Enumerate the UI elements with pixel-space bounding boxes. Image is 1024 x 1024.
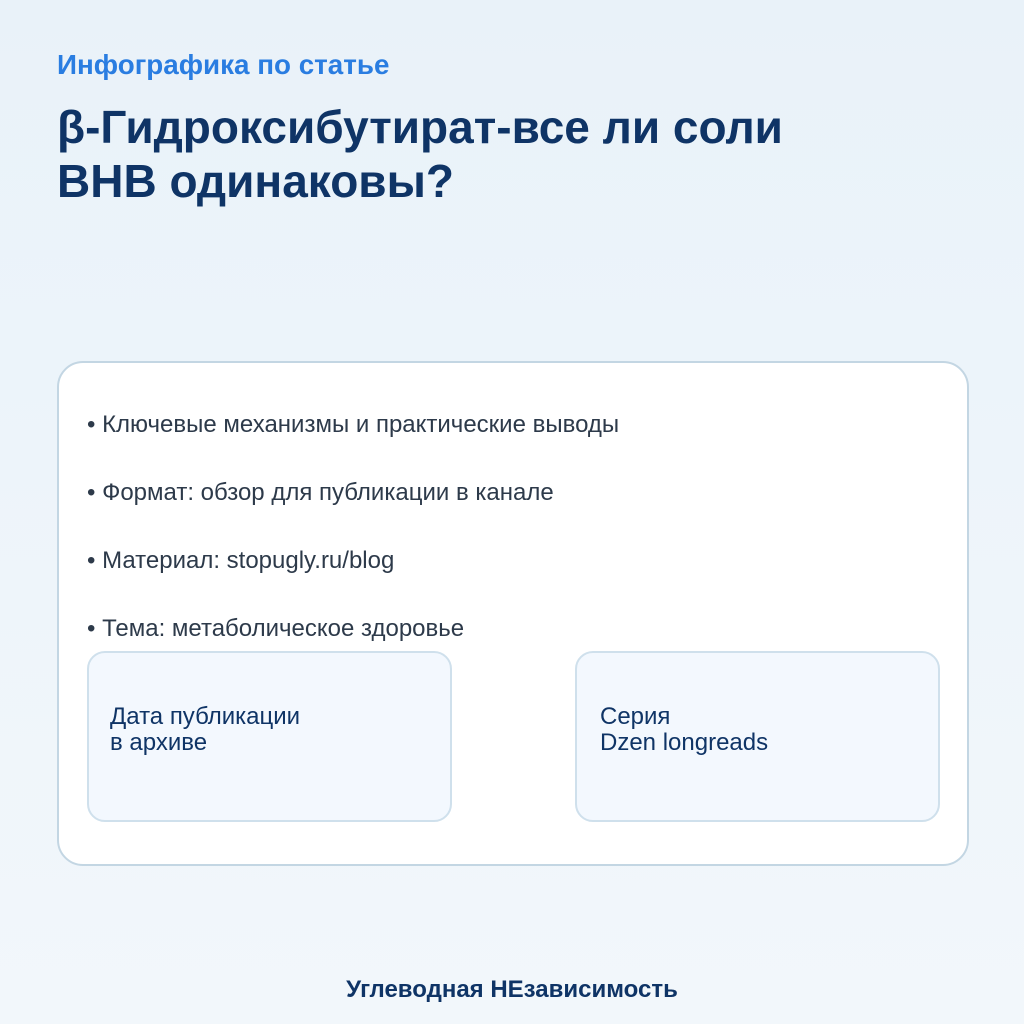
title: BHB одинаковы? bbox=[57, 155, 454, 207]
panel: series box bbox=[575, 651, 940, 822]
panel: date box bbox=[87, 651, 452, 822]
subtitle: Инфографика по статье bbox=[57, 49, 389, 80]
text block: bullets bbox=[87, 411, 619, 642]
title: β-Гидроксибутират-все ли соли bbox=[57, 101, 783, 153]
panel: date box: в архиве bbox=[110, 729, 207, 756]
text block: bullets: • Ключевые механизмы и практические выводы bbox=[87, 411, 619, 438]
text block: bullets: • Материал: stopugly.ru/blog bbox=[87, 547, 394, 574]
title bbox=[57, 101, 783, 207]
text block: bullets: • Формат: обзор для публикации в канале bbox=[87, 479, 554, 506]
panel: series box: Dzen longreads bbox=[600, 729, 768, 756]
footer: Углеводная НЕзависимость bbox=[346, 976, 678, 1003]
panel: series box: Серия bbox=[600, 703, 670, 730]
text block: bullets: • Тема: метаболическое здоровье bbox=[87, 615, 464, 642]
panel: date box: Дата публикации bbox=[110, 703, 300, 730]
panel: main card bbox=[57, 361, 969, 866]
